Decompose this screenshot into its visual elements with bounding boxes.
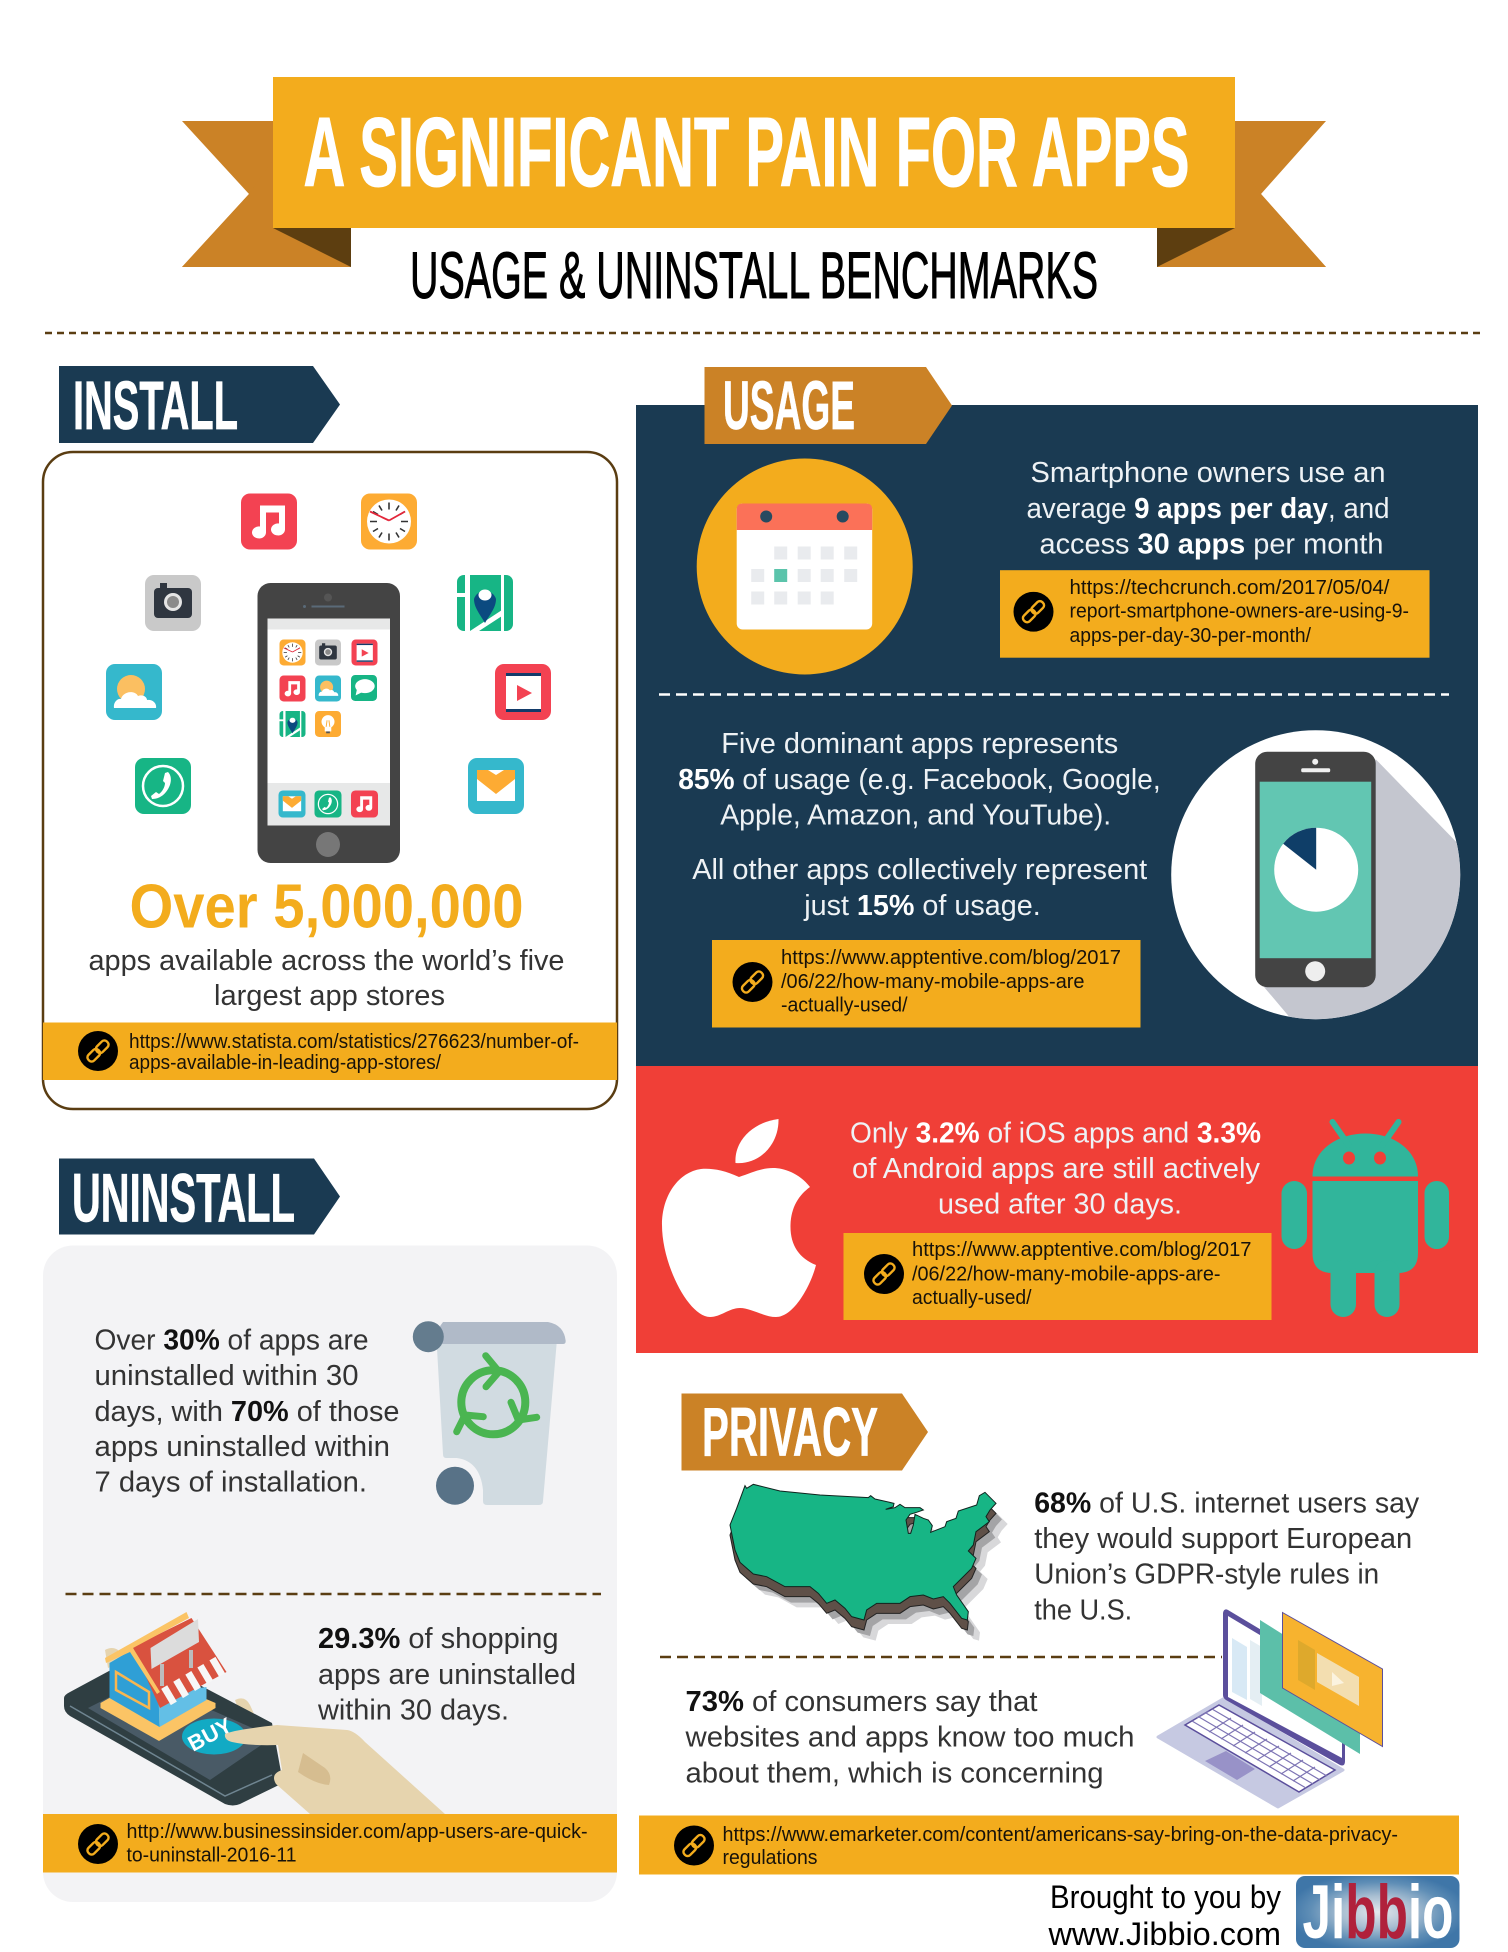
privacy heading tag: PRIVACY (702, 1394, 878, 1470)
install description: largest app stores (214, 980, 445, 1012)
panel: install (43, 452, 617, 1109)
shopping stat text: within 30 days. (317, 1694, 509, 1726)
icon: apple logo (662, 1119, 816, 1317)
source link: techcrunch: report-smartphone-owners-are-using-9- (1070, 601, 1409, 623)
illustration: laptop with windows (1158, 1609, 1382, 1807)
retention stat text: used after 30 days. (938, 1188, 1182, 1220)
uninstall stat text: days, with 70% of those (94, 1396, 399, 1428)
uninstall stat text: apps uninstalled within (94, 1431, 390, 1463)
source link: statista: apps-available-in-leading-app-stores/ (129, 1052, 441, 1074)
map: united states (730, 1484, 1008, 1641)
usage stat: dominant apps: All other apps collectively represent (692, 854, 1147, 886)
usage stat: apps per day: access 30 apps per month (1040, 528, 1384, 560)
source link: apptentive: /06/22/how-many-mobile-apps-are- (912, 1264, 1220, 1286)
privacy stat: know too much (684, 1686, 1134, 1790)
source link: apptentive (712, 940, 1140, 1028)
source link: apptentive: /06/22/how-many-mobile-apps-are (781, 971, 1084, 993)
source link: emarketer: regulations (722, 1847, 818, 1869)
usage stat: dominant apps: just 15% of usage. (803, 890, 1041, 922)
icon: phone with pie chart (1171, 730, 1468, 1039)
source link: emarketer (639, 1816, 1459, 1874)
usage stat: dominant apps: Five dominant apps represents (721, 728, 1118, 760)
source link: apptentive: actually-used/ (912, 1287, 1032, 1309)
shopping stat text: 29.3% of shopping (318, 1623, 558, 1655)
source link: business insider: http://www.businessinsider.com/app-users-are-quick- (126, 1821, 588, 1843)
uninstall heading tag: UNINSTALL (72, 1160, 295, 1236)
panel: uninstall (43, 1246, 617, 1902)
usage stat: apps per day: Smartphone owners use an (1030, 457, 1386, 489)
usage stat: dominant apps (678, 728, 1161, 922)
shopping stat text (317, 1623, 576, 1726)
privacy stat: GDPR: Union’s GDPR-style rules in (1034, 1559, 1379, 1591)
privacy stat: know too much: websites and apps know too much (684, 1722, 1134, 1754)
title ribbon (182, 77, 1326, 267)
icon: android robot (1282, 1122, 1449, 1317)
install description: apps available across the world’s five (88, 945, 564, 977)
source link: techcrunch (1000, 570, 1430, 658)
install description (88, 945, 564, 1012)
uninstall stat text: Over 30% of apps are (94, 1324, 368, 1356)
privacy stat: know too much: about them, which is concerning (686, 1758, 1104, 1790)
credit text: www.Jibbio.com (1047, 1916, 1281, 1952)
source link: apptentive (844, 1233, 1272, 1320)
source link: techcrunch: apps-per-day-30-per-month/ (1070, 625, 1311, 647)
app icons ring (106, 494, 551, 814)
credit text (1047, 1879, 1281, 1952)
uninstall stat text: uninstalled within 30 (94, 1360, 358, 1392)
privacy stat: GDPR: the U.S. (1034, 1595, 1132, 1627)
illustration: shop on smartphone with hand (64, 1612, 445, 1814)
source link: apptentive: -actually-used/ (781, 994, 908, 1016)
panel: active apps red (636, 1066, 1478, 1353)
illustration: shop on smartphone with hand: BUY (184, 1712, 237, 1756)
retention stat text: Only 3.2% of iOS apps and 3.3% (850, 1118, 1261, 1150)
source link: statista (43, 1022, 617, 1080)
install heading tag: INSTALL (73, 367, 238, 444)
uninstall stat text (94, 1324, 399, 1498)
usage heading tag: USAGE (723, 367, 855, 444)
icon: smartphone with apps (258, 583, 400, 863)
icon: recycling bin (413, 1321, 566, 1505)
usage stat: apps per day (1026, 457, 1390, 560)
shopping stat text: apps are uninstalled (318, 1659, 576, 1691)
source link: business insider: to-uninstall-2016-11 (126, 1844, 296, 1866)
usage stat: dominant apps: 85% of usage (e.g. Facebook, Google, (678, 764, 1161, 796)
privacy stat: GDPR (1034, 1488, 1420, 1627)
source link: business insider (43, 1814, 617, 1872)
source link: techcrunch: https://techcrunch.com/2017/05/04/ (1070, 577, 1390, 599)
panel: usage navy (636, 405, 1478, 1066)
usage stat: apps per day: average 9 apps per day, and (1026, 493, 1390, 525)
source link: emarketer: https://www.emarketer.com/content/americans-say-bring-on-the-data-privacy- (722, 1824, 1398, 1846)
privacy stat: GDPR: they would support European (1034, 1523, 1412, 1555)
source link: statista: https://www.statista.com/statistics/276623/number-of- (129, 1031, 579, 1053)
privacy stat: know too much: 73% of consumers say that (686, 1686, 1038, 1718)
credit text: Brought to you by (1050, 1879, 1281, 1915)
retention stat text: of Android apps are still actively (852, 1153, 1261, 1185)
privacy stat: GDPR: 68% of U.S. internet users say (1034, 1488, 1420, 1520)
usage stat: dominant apps: Apple, Amazon, and YouTube). (720, 800, 1111, 832)
uninstall stat text: 7 days of installation. (94, 1466, 367, 1498)
statistic: over 5,000,000: Over 5,000,000 (130, 872, 524, 942)
uninstall heading tag (59, 1158, 340, 1236)
retention stat text (850, 1118, 1261, 1220)
icon: calendar (697, 458, 913, 674)
source link: apptentive: https://www.apptentive.com/blog/2017 (912, 1239, 1252, 1261)
source link: apptentive: https://www.apptentive.com/blog/2017 (781, 947, 1121, 969)
